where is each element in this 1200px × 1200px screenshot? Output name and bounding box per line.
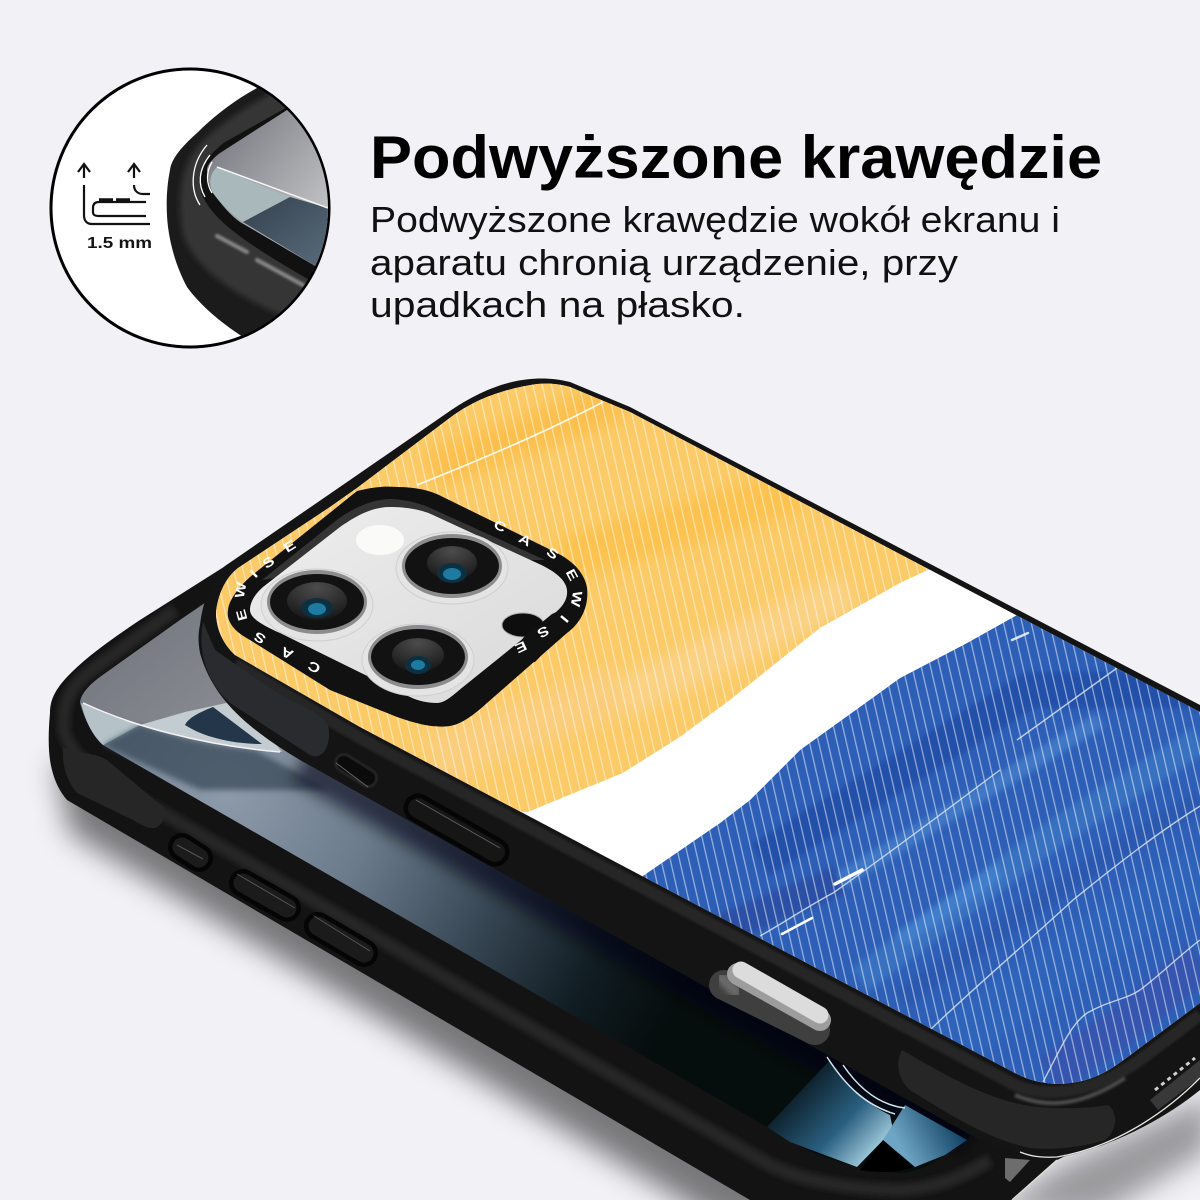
phone shadow	[55, 763, 1200, 1200]
case artwork	[216, 384, 1200, 1084]
mute switch	[336, 763, 368, 787]
brand text ring: I	[247, 567, 261, 581]
blue paint lines	[760, 668, 1200, 1082]
brand text ring: W	[232, 580, 250, 599]
wallpaper: gray top	[82, 480, 400, 752]
yellow paint texture	[430, 400, 850, 760]
stripes	[216, 384, 1200, 1084]
brand text ring: S	[543, 544, 561, 563]
title: Podwyższone krawędzie	[370, 124, 1102, 191]
bumper corner patch	[63, 747, 164, 828]
callout: raised edge inset circle	[50, 68, 330, 348]
white band cover over stripes	[528, 560, 1017, 878]
inset phone corner photo	[166, 88, 328, 336]
button: small	[177, 845, 203, 859]
microphone hole	[502, 613, 544, 637]
front phone frame	[198, 379, 1200, 1158]
brand text ring: A	[516, 531, 534, 550]
back phone frame	[49, 470, 1200, 1200]
wallpaper: dark band	[103, 725, 330, 790]
brand text ring: C	[306, 657, 323, 676]
brand text ring: S	[534, 622, 551, 641]
lens 1	[261, 569, 373, 641]
wallpaper: pale area	[140, 700, 282, 752]
lens 3	[362, 624, 474, 696]
bezel inner wall	[262, 499, 545, 580]
brand text ring: W	[567, 590, 585, 609]
brand text ring: I	[557, 612, 571, 625]
brand text ring: A	[279, 643, 296, 662]
back phone, screen side	[48, 565, 1200, 1200]
blue paint texture	[720, 690, 1200, 1075]
yellow paint	[216, 384, 929, 812]
button: volume up	[237, 874, 295, 908]
wallpaper: navy shape	[185, 707, 262, 744]
camera bezel	[228, 487, 587, 727]
shadow under front phone	[300, 765, 970, 1140]
front corner glossy patch	[898, 1050, 1115, 1149]
description text: aparatu chronią urządzenie, przy	[370, 242, 958, 283]
blue paint	[643, 600, 1200, 1120]
brand text ring: E	[234, 608, 251, 622]
lower edge light line	[1020, 1078, 1200, 1157]
front phone, back side	[198, 370, 1200, 1158]
description text	[370, 199, 1060, 325]
label: 1.5 mm: 1.5 mm	[87, 235, 152, 252]
lens 2	[396, 532, 508, 604]
description text: upadkach na płasko.	[370, 284, 745, 325]
rim highlight near screen	[64, 610, 990, 1190]
brand text ring: E	[512, 637, 529, 656]
brand text ring: S	[260, 553, 278, 572]
silver button	[722, 970, 820, 1030]
white band	[200, 370, 1200, 1130]
button: volume down	[314, 916, 370, 953]
frame bevel	[235, 664, 1200, 1092]
light edge line	[1012, 1160, 1057, 1200]
bezel wedge over hole	[505, 606, 575, 662]
camera glass	[250, 507, 567, 703]
brand text ring: S	[251, 628, 269, 647]
camera module	[228, 487, 587, 727]
yellow crack line	[417, 402, 603, 485]
flash	[356, 525, 404, 555]
brand text ring: E	[562, 567, 581, 584]
icon: curved white edge arcs	[193, 145, 212, 205]
port on back phone	[1005, 1158, 1030, 1182]
wallpaper: blue rays	[767, 1057, 967, 1172]
speaker teeth	[1155, 1058, 1195, 1090]
brand text ring	[232, 517, 585, 676]
wallpaper: light wedge	[81, 703, 140, 745]
icon: raised edge diagram	[78, 164, 150, 224]
port detail	[1150, 1060, 1200, 1110]
wallpaper: white arc	[83, 703, 280, 752]
description text: Podwyższone krawędzie wokół ekranu i	[370, 199, 1060, 240]
glossy highlight	[1015, 1078, 1125, 1103]
left bumper patch	[201, 622, 329, 756]
paint highlights	[608, 388, 1028, 934]
brand text ring: C	[491, 517, 509, 536]
side button	[416, 800, 500, 852]
brand text ring: E	[281, 537, 299, 556]
screen	[80, 480, 1000, 1173]
